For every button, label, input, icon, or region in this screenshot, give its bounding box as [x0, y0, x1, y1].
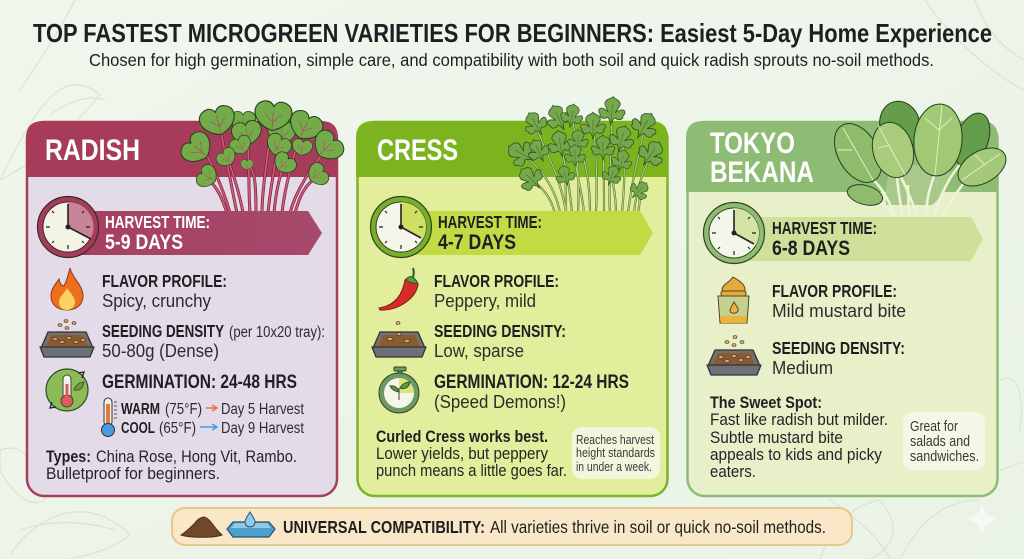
tokyo bekana heading: BEKANA: [710, 156, 814, 189]
cool row: (65°F): [159, 420, 196, 437]
cress seeding label: SEEDING DENSITY:: [434, 321, 566, 341]
icon: thermometer: [102, 398, 117, 436]
tokyo bekana callout: [903, 412, 985, 470]
cress tip: Curled Cress works best.: [376, 427, 548, 446]
radish heading: RADISH: [45, 134, 140, 167]
cress flavor label: FLAVOR PROFILE:: [434, 271, 559, 291]
cress tip: Lower yields, but peppery: [376, 444, 548, 463]
tokyo bekana harvest value: 6-8 DAYS: [772, 237, 850, 260]
radish types note: China Rose, Hong Vit, Rambo.: [96, 447, 297, 466]
warm row: WARM: [121, 401, 160, 418]
subtitle: Chosen for high germination, simple care, and compatibility with both soil and quick radish sprouts no-soil methods.: [89, 50, 934, 70]
radish seeding value: 50-80g (Dense): [102, 340, 219, 361]
radish types note: [46, 447, 297, 483]
tokyo bekana harvest arrow: [734, 217, 983, 261]
radish types note: Bulletproof for beginners.: [46, 464, 220, 483]
tokyo bekana seeding value: Medium: [772, 357, 833, 378]
cress germination note: (Speed Demons!): [434, 391, 566, 412]
icon: chili pepper: [379, 268, 418, 310]
cress germination heading: GERMINATION: 12-24 HRS: [434, 372, 629, 393]
icon: stopwatch: [379, 367, 419, 413]
cress heading: CRESS: [377, 134, 458, 167]
tokyo bekana harvest label: HARVEST TIME:: [772, 218, 877, 238]
icon: mustard jar: [718, 277, 749, 323]
cress sprout illustration: [502, 96, 670, 213]
banner label: UNIVERSAL COMPATIBILITY:: [283, 517, 485, 537]
cress flavor value: Peppery, mild: [434, 290, 536, 311]
radish types note: Types:: [46, 447, 91, 466]
radish flavor label: FLAVOR PROFILE:: [102, 271, 227, 291]
tokyo bekana flavor label: FLAVOR PROFILE:: [772, 281, 897, 301]
tokyo bekana sweet spot: [710, 393, 888, 481]
cress harvest arrow: [401, 211, 653, 255]
cool row: [121, 420, 305, 437]
tokyo bekana sweet spot: appeals to kids and picky: [710, 445, 882, 464]
tokyo bekana callout: salads and: [910, 434, 970, 450]
icon: sparse seed tray: [372, 322, 426, 357]
panel: tokyo bekana: [686, 97, 1013, 496]
radish harvest label: HARVEST TIME:: [105, 212, 210, 232]
panel: radish: [26, 100, 348, 496]
icon: thermometer badge: [46, 369, 88, 411]
cress callout: Reaches harvest: [576, 432, 654, 447]
cress callout: [572, 427, 660, 479]
tokyo bekana callout: Great for: [910, 419, 958, 435]
icon: soil pile: [181, 517, 222, 537]
cress callout: in under a week.: [576, 459, 652, 474]
radish flavor value: Spicy, crunchy: [102, 290, 212, 311]
tokyo bekana header band: [686, 121, 998, 192]
icon: tokyo bekana clock: [704, 202, 764, 264]
icon: dense seed tray: [40, 320, 94, 357]
tokyo bekana heading: [710, 127, 814, 189]
radish harvest arrow: [68, 211, 322, 255]
tokyo bekana flavor value: Mild mustard bite: [772, 300, 906, 321]
watermark star: [966, 503, 998, 535]
icon: flame: [51, 268, 83, 310]
icon: radish clock: [38, 196, 98, 258]
radish sprout illustration: [177, 100, 348, 213]
tokyo bekana sweet spot: The Sweet Spot:: [710, 393, 822, 412]
cress tip: [376, 427, 567, 480]
banner text: All varieties thrive in soil or quick no-soil methods.: [490, 517, 826, 537]
panel: cress: [356, 96, 670, 496]
icon: medium seed tray: [707, 336, 761, 375]
cool row: Day 9 Harvest: [221, 420, 305, 437]
radish seeding tray size: (per 10x20 tray):: [229, 324, 325, 341]
icon: cress clock: [370, 196, 432, 258]
radish seeding label: SEEDING DENSITY: [102, 321, 224, 341]
warm row: [121, 401, 305, 418]
tokyo bekana callout: sandwiches.: [910, 449, 979, 465]
cress seeding value: Low, sparse: [434, 340, 524, 361]
tokyo bekana sweet spot: Fast like radish but milder.: [710, 410, 888, 429]
cress tip: punch means a little goes far.: [376, 461, 567, 480]
banner: universal compatibility: [172, 508, 852, 545]
radish germination heading: GERMINATION: 24-48 HRS: [102, 372, 297, 393]
cress header band: [356, 121, 668, 177]
warm row: (75°F): [165, 401, 202, 418]
cool row: COOL: [121, 420, 155, 437]
radish header band: [26, 121, 338, 177]
tokyo bekana sweet spot: Subtle mustard bite: [710, 428, 843, 447]
cress callout: height standards: [576, 445, 655, 460]
tokyo bekana heading: TOKYO: [710, 127, 795, 160]
tokyo bekana seeding label: SEEDING DENSITY:: [772, 338, 905, 358]
cress harvest label: HARVEST TIME:: [438, 212, 542, 232]
radish harvest value: 5-9 DAYS: [105, 231, 183, 254]
cress harvest value: 4-7 DAYS: [438, 231, 516, 254]
icon: water tray: [227, 512, 275, 537]
tokyo bekana leaf illustration: [825, 97, 1013, 219]
warm row: Day 5 Harvest: [221, 401, 305, 418]
tokyo bekana sweet spot: eaters.: [710, 462, 756, 481]
